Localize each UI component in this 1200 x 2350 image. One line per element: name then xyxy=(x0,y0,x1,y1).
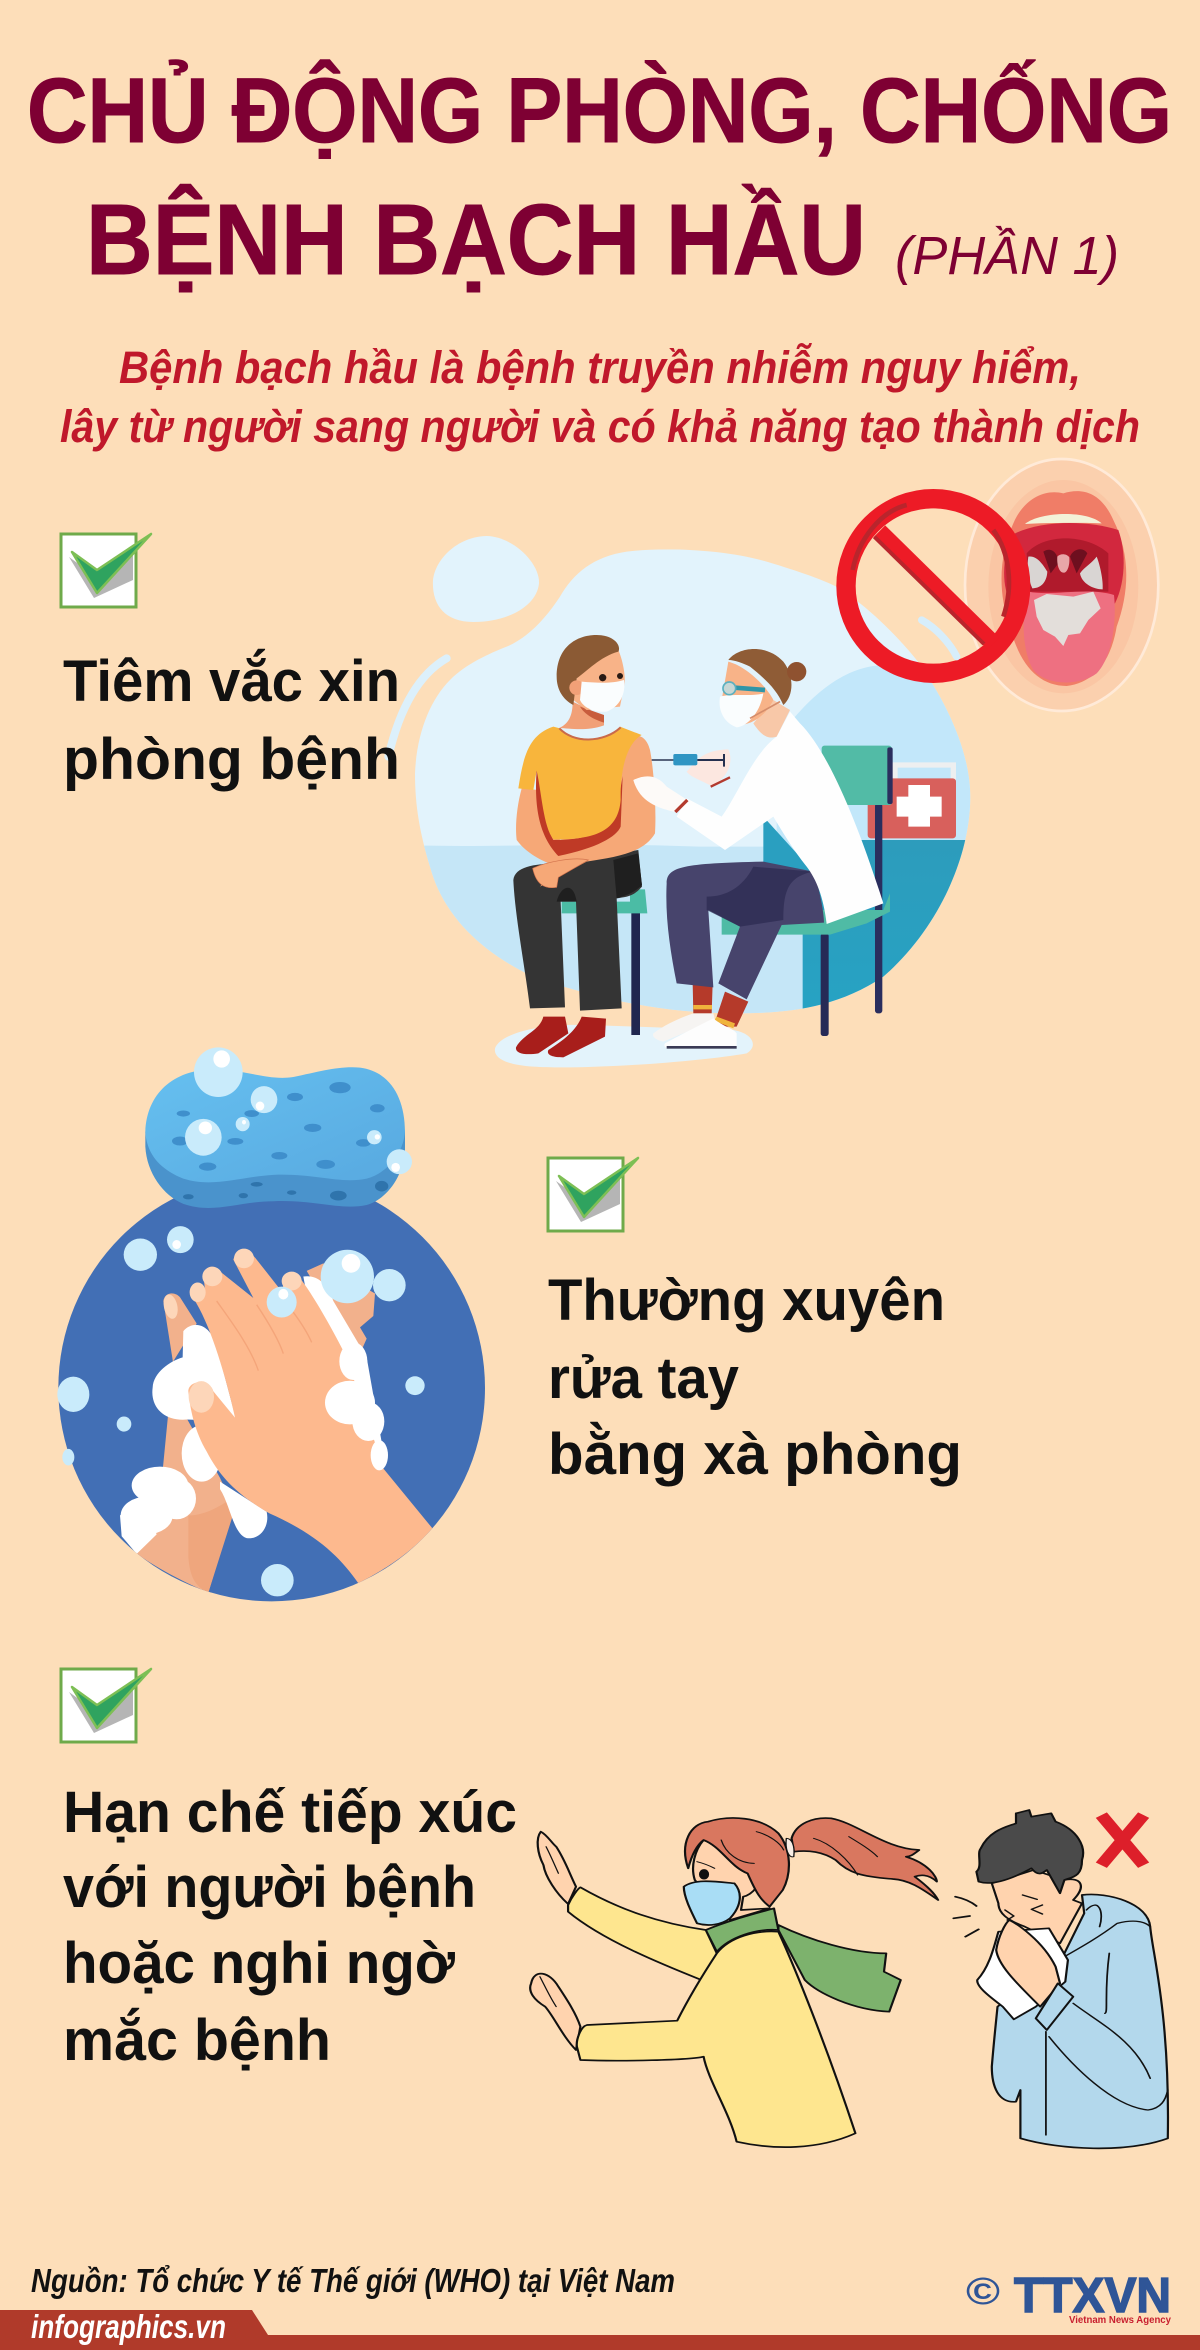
woman mask xyxy=(684,1881,740,1925)
patient chair xyxy=(562,889,647,1035)
item 1 text: Tiêm vắc xin xyxy=(63,649,400,714)
patient shirt xyxy=(518,727,642,839)
red cross mark xyxy=(1105,1819,1140,1861)
illustration: avoid contact with sick person xyxy=(530,1810,1168,2148)
patient arms xyxy=(516,735,655,887)
subtitle line 1: Bệnh bạch hầu là bệnh truyền nhiễm nguy hiểm, xyxy=(119,342,1081,393)
sponge xyxy=(145,1067,405,1208)
woman body xyxy=(577,1931,855,2147)
subtitle xyxy=(60,342,1140,452)
back hand xyxy=(137,1293,234,1593)
hood and seam lines xyxy=(1046,1905,1168,2135)
nurse hair xyxy=(728,649,791,705)
patient eyes xyxy=(599,674,606,681)
item 3 text: mắc bệnh xyxy=(63,2008,331,2073)
foam over hand edge xyxy=(325,1342,388,1470)
nurse shoes xyxy=(653,1013,715,1042)
teeth xyxy=(1025,514,1102,524)
sneeze lines xyxy=(954,1897,979,1937)
sponge side xyxy=(145,1132,405,1208)
face skin xyxy=(965,459,1158,711)
nurse trousers xyxy=(666,862,824,999)
nurse face xyxy=(722,662,773,725)
nails xyxy=(161,1249,302,1413)
floor shadow xyxy=(495,1025,753,1067)
tongue xyxy=(1024,592,1115,682)
part label: (PHẦN 1) xyxy=(895,226,1119,286)
item 2 text: Thường xuyên xyxy=(548,1268,945,1333)
item 1 text: phòng bệnh xyxy=(63,727,400,792)
woman lower hand xyxy=(530,1974,580,2050)
patient hand xyxy=(533,859,588,888)
man cuff xyxy=(1036,1983,1073,2030)
decorative streak left xyxy=(388,658,447,757)
background blob xyxy=(415,550,970,1014)
title xyxy=(27,59,1172,296)
website: infographics.vn xyxy=(31,2308,226,2345)
item 1 xyxy=(61,534,400,792)
nurse mask xyxy=(720,693,763,727)
nurse xyxy=(633,649,883,1049)
tonsils xyxy=(1028,556,1103,589)
item 2 text: bằng xà phòng xyxy=(548,1422,962,1487)
patient shirt shadow xyxy=(536,770,623,856)
upper bubble lobe xyxy=(433,536,539,622)
medical kit xyxy=(868,765,956,838)
item 3 text: hoặc nghi ngờ xyxy=(63,1931,456,1996)
item 3 text: Hạn chế tiếp xúc xyxy=(63,1780,517,1845)
sponge top xyxy=(145,1067,405,1182)
man hand xyxy=(996,1920,1060,2007)
patient mask xyxy=(580,680,624,712)
front hand xyxy=(188,1252,433,1583)
finger lines xyxy=(540,1847,558,2007)
item 3 xyxy=(61,1669,517,2073)
foam under hand xyxy=(120,1276,383,1554)
woman upper hand xyxy=(538,1832,576,1904)
logo: TTXVN xyxy=(966,2269,1171,2326)
title line 2: BỆNH BẠCH HẦU xyxy=(86,184,866,296)
patient shoes xyxy=(516,1017,568,1054)
woman xyxy=(530,1818,938,2147)
nurse socks xyxy=(693,983,748,1027)
man hoodie xyxy=(992,1894,1168,2148)
man tissue xyxy=(977,1928,1068,2019)
patient trousers xyxy=(513,850,642,1011)
agency tagline: Vietnam News Agency xyxy=(1069,2315,1171,2326)
nurse chair xyxy=(722,746,893,1036)
woman hair xyxy=(685,1818,789,1907)
mouth interior xyxy=(1004,523,1124,603)
decorative streaks xyxy=(922,620,957,657)
patient xyxy=(513,635,655,1057)
nurse gloves xyxy=(633,776,687,812)
sponge holes xyxy=(172,1082,388,1200)
man xyxy=(976,1810,1168,2148)
item 1 text xyxy=(63,649,400,792)
finger creases xyxy=(217,1301,312,1371)
item 2 text xyxy=(548,1268,962,1487)
checkbox xyxy=(61,1669,151,1742)
nurse coat xyxy=(677,712,883,924)
copyright mark: © xyxy=(966,2271,1000,2313)
agency wordmark: TTXVN xyxy=(1014,2269,1171,2323)
source note: Nguồn: Tổ chức Y tế Thế giới (WHO) tại Việt Nam xyxy=(31,2262,675,2299)
blue circle xyxy=(58,1175,485,1601)
patient face xyxy=(573,650,625,710)
nurse teal top xyxy=(763,817,813,872)
patient hair xyxy=(557,635,619,705)
man eyes and nose xyxy=(1005,1895,1042,1920)
syringe xyxy=(652,754,725,767)
throat xyxy=(1027,538,1108,592)
woman ponytail xyxy=(792,1818,938,1900)
item 3 text xyxy=(63,1780,517,2073)
item 2 xyxy=(548,1158,962,1487)
soap bubbles xyxy=(57,1047,425,1596)
woman scarf xyxy=(778,1925,901,2012)
woman face xyxy=(693,1840,770,1920)
item 2 text: rửa tay xyxy=(548,1346,739,1411)
footer band xyxy=(0,2308,1200,2350)
illustration: hand washing xyxy=(57,1047,485,1601)
hands xyxy=(120,1249,433,1593)
woman upper arm xyxy=(568,1887,717,1980)
prohibition sign xyxy=(846,499,1021,673)
uvula xyxy=(1057,554,1069,573)
checkbox xyxy=(61,534,151,607)
patient neck xyxy=(559,702,604,729)
item 3 text: với người bệnh xyxy=(63,1855,476,1920)
checkbox xyxy=(548,1158,638,1231)
nurse goggles xyxy=(730,687,765,690)
nurse neck xyxy=(753,700,790,738)
lips xyxy=(1002,491,1126,686)
man face xyxy=(992,1870,1082,1943)
illustration: throat with white membrane xyxy=(846,459,1158,711)
illustration: vaccination scene xyxy=(388,527,1003,1067)
woman eye xyxy=(700,1870,708,1879)
man hair xyxy=(976,1810,1083,1893)
tongue membrane xyxy=(1034,592,1101,646)
